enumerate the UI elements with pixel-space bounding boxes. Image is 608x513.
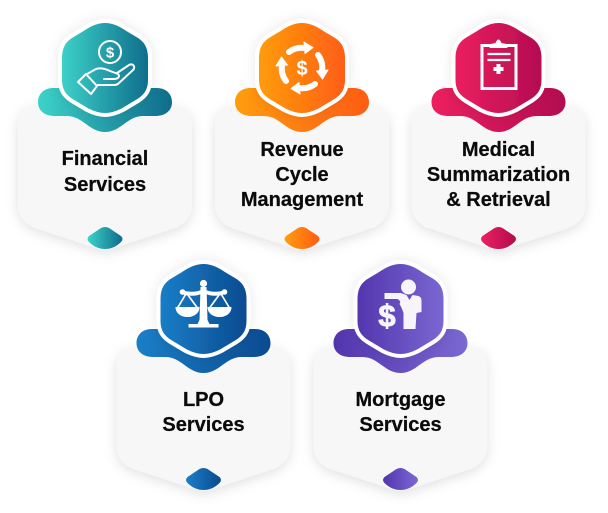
icon: circular arrows with dollar bbox=[276, 42, 328, 94]
label: Cycle bbox=[275, 164, 329, 186]
card: Financial Services bbox=[18, 21, 192, 250]
ribbon band bbox=[334, 329, 468, 373]
card: Mortgage Services bbox=[314, 262, 488, 491]
card body bbox=[412, 106, 586, 250]
label: Mortgage bbox=[356, 389, 446, 411]
hexagon badge bbox=[356, 262, 446, 356]
label: & Retrieval bbox=[446, 189, 551, 211]
hexagon badge bbox=[60, 21, 150, 115]
icon: scales of justice bbox=[176, 280, 232, 328]
label: Summarization bbox=[427, 164, 570, 186]
label: Financial bbox=[62, 148, 148, 170]
bottom diamond bbox=[481, 227, 516, 249]
icon: circular arrows with dollar: $ bbox=[296, 58, 308, 80]
label: Services bbox=[162, 414, 245, 436]
ribbon band bbox=[38, 88, 172, 132]
icon: medical clipboard bbox=[482, 40, 516, 88]
label: Services bbox=[359, 414, 442, 436]
hexagon badge bbox=[454, 21, 544, 115]
bottom diamond bbox=[284, 227, 320, 249]
icon: hand holding coin bbox=[78, 41, 134, 94]
hexagon badge bbox=[257, 21, 347, 115]
bottom diamond bbox=[186, 468, 221, 490]
card body bbox=[116, 347, 290, 491]
card body bbox=[18, 106, 192, 250]
icon: person with dollar bbox=[378, 280, 422, 333]
card body bbox=[314, 347, 488, 491]
bottom diamond bbox=[88, 227, 122, 249]
label: LPO bbox=[183, 389, 224, 411]
hexagon badge bbox=[158, 262, 248, 356]
card: Medical Summarization & Retrieval bbox=[412, 21, 586, 250]
card: Revenue Cycle Management bbox=[215, 21, 389, 250]
bottom diamond bbox=[383, 468, 418, 490]
label: Management bbox=[241, 189, 363, 211]
icon: person with dollar: $ bbox=[378, 298, 396, 333]
label: Services bbox=[64, 174, 146, 196]
label: Medical bbox=[462, 139, 535, 161]
ribbon band bbox=[235, 88, 369, 132]
ribbon band bbox=[136, 329, 270, 373]
card body bbox=[215, 106, 389, 250]
ribbon band bbox=[432, 88, 566, 132]
icon: hand holding coin: $ bbox=[106, 44, 115, 62]
card: LPO Services bbox=[116, 262, 290, 491]
label: Revenue bbox=[260, 139, 344, 161]
